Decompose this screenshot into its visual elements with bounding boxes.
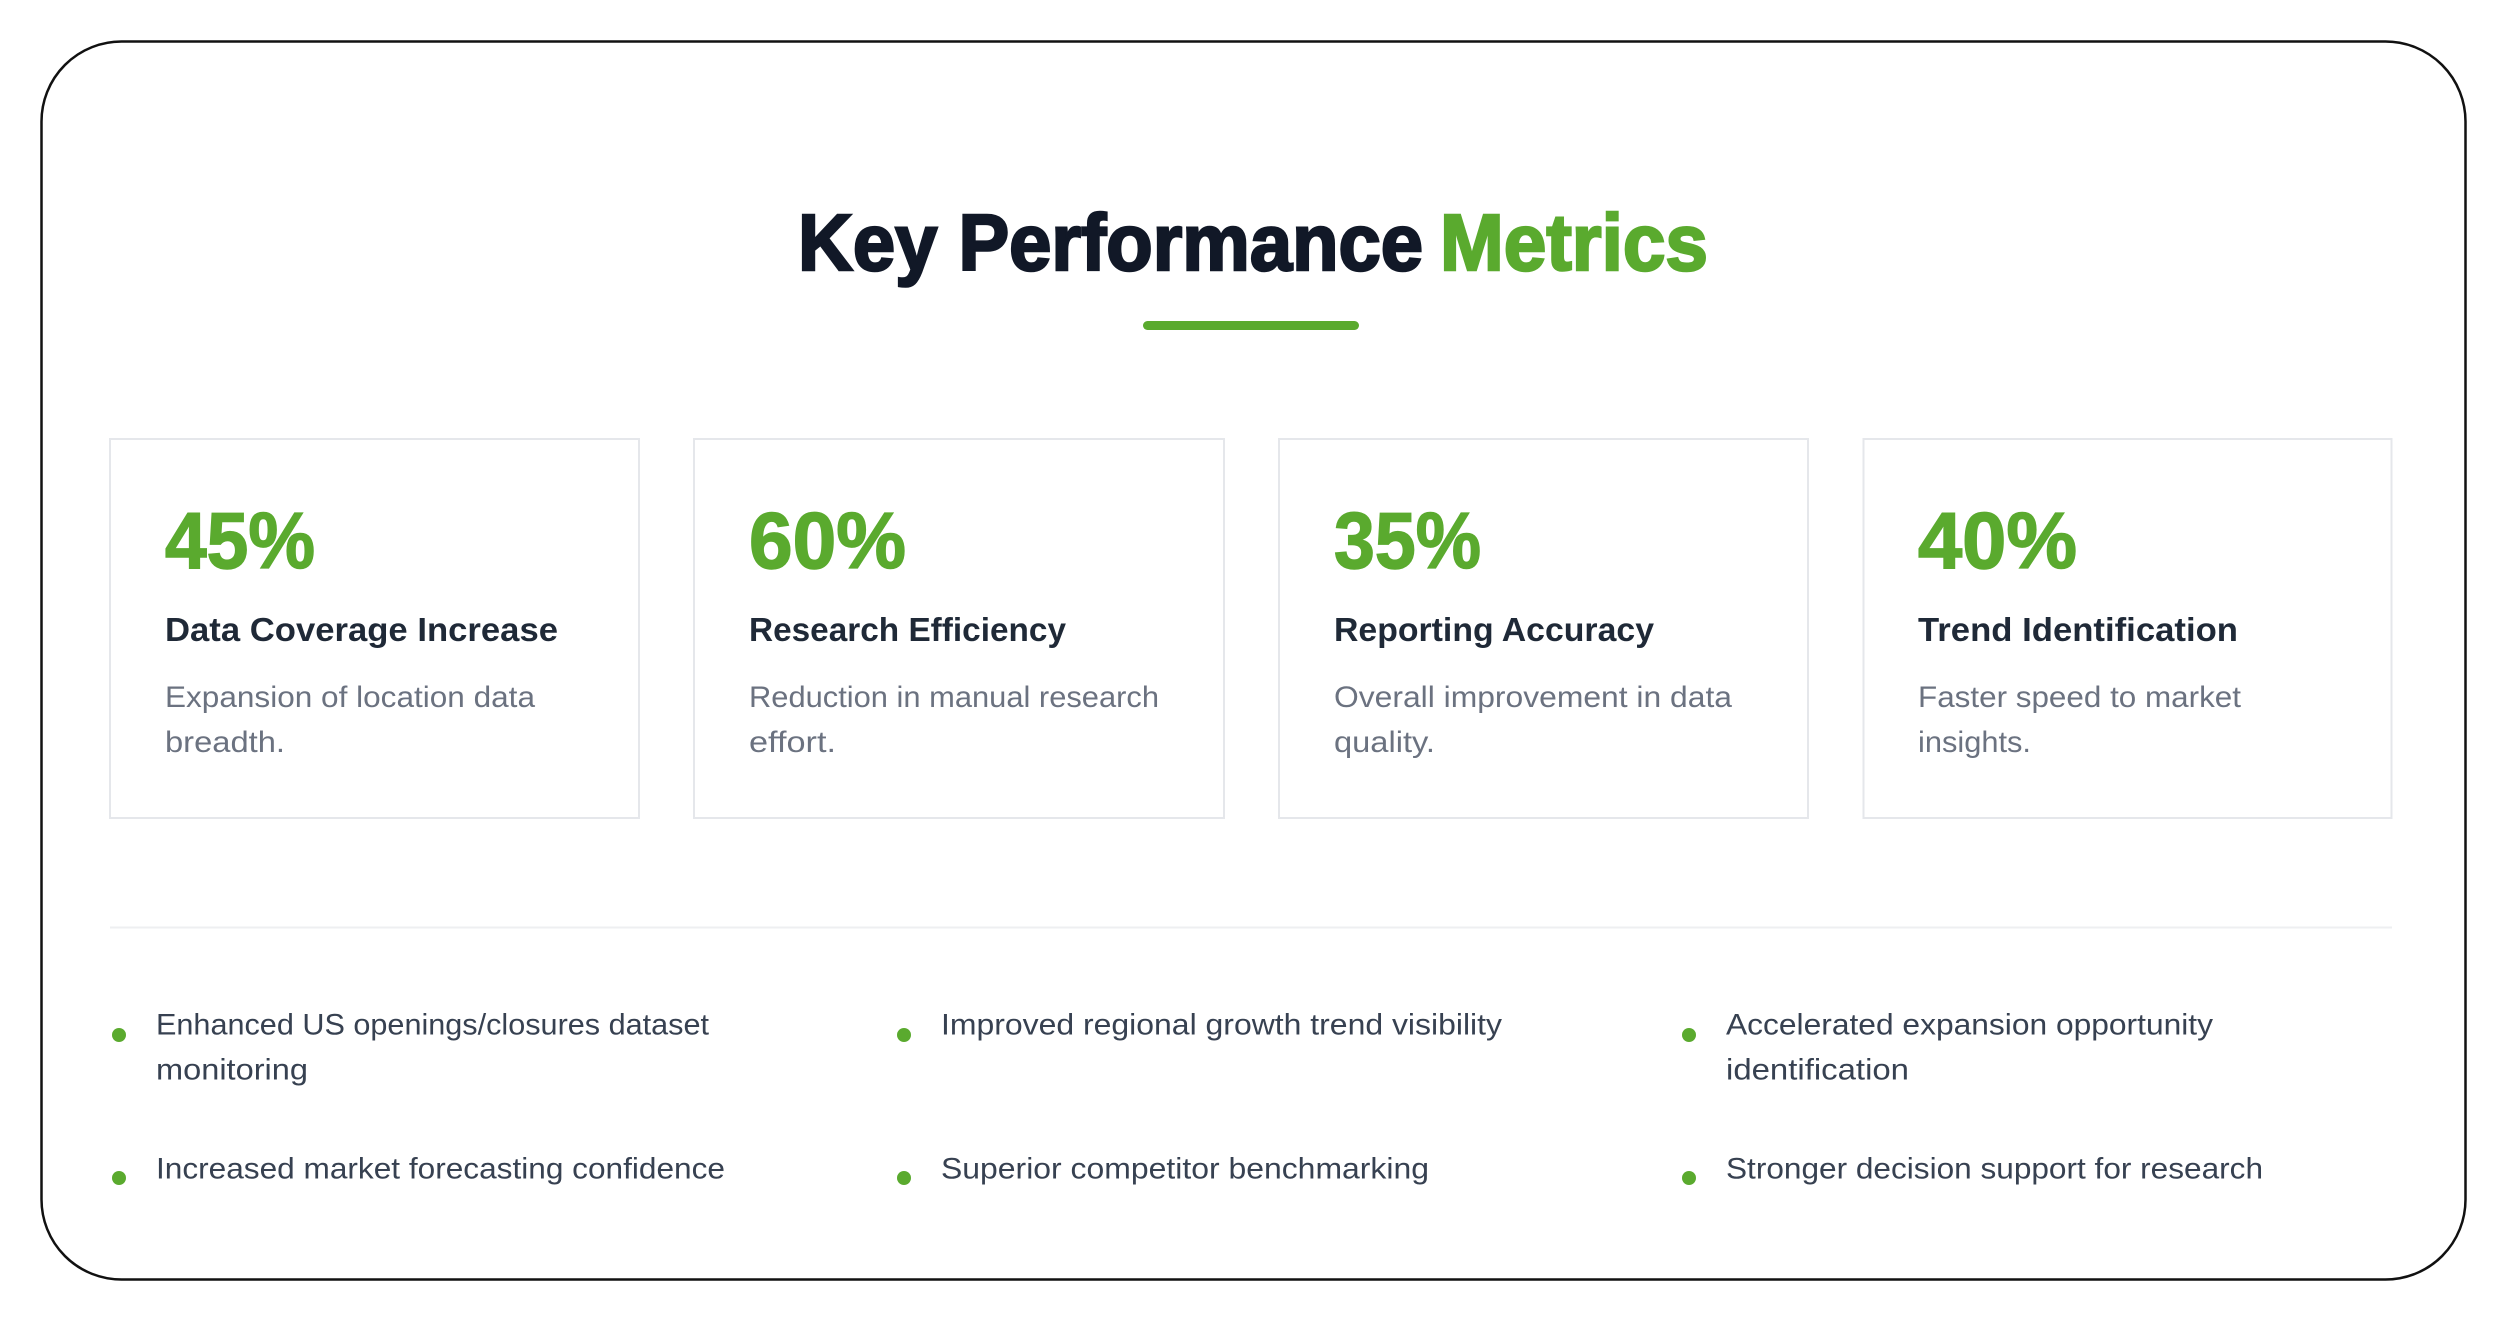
title: Metrics <box>1440 198 1708 287</box>
description: trend identification <box>1918 681 2242 759</box>
list item: openings/closures dataset: monitoring <box>156 1054 308 1086</box>
heading: trend identification: Trend Identification <box>1918 612 2238 649</box>
description: trend identification: insights. <box>1918 726 2031 759</box>
description: data coverage: breadth. <box>165 726 285 759</box>
list item: expansion opportunity: Accelerated expansion opportunity <box>1726 1008 2213 1042</box>
description: research efficiency: effort. <box>749 726 836 759</box>
list item: openings/closures dataset <box>112 1008 710 1086</box>
list item: expansion opportunity: identification <box>1726 1054 1909 1086</box>
stat: 60%: 60% <box>749 496 906 585</box>
description: research efficiency: Reduction in manual research <box>749 681 1159 714</box>
panel: research efficiency card <box>694 439 1224 818</box>
description: reporting accuracy: Overall improvement in data <box>1334 681 1732 714</box>
list item: openings/closures dataset: Enhanced US openings/closures dataset <box>156 1008 710 1042</box>
panel: reporting accuracy card <box>1279 439 1808 818</box>
panel: trend identification card <box>1864 439 2392 818</box>
stat: 35%: 35% <box>1334 496 1481 585</box>
list item: forecasting confidence: Increased market forecasting confidence <box>156 1152 725 1186</box>
heading: reporting accuracy: Reporting Accuracy <box>1334 612 1654 649</box>
heading: data coverage increase: Data Coverage Increase <box>165 612 558 649</box>
description: reporting accuracy: quality. <box>1334 726 1435 759</box>
list item: decision support: Stronger decision support for research <box>1726 1152 2263 1186</box>
panel: data coverage card <box>110 439 639 818</box>
heading: research efficiency: Research Efficiency <box>749 612 1066 649</box>
description: data coverage: Expansion of location data <box>165 681 535 714</box>
description: data coverage <box>165 681 535 759</box>
description: reporting accuracy <box>1334 681 1732 759</box>
list item: regional growth: Improved regional growth trend visibility <box>941 1008 1502 1042</box>
description: research efficiency <box>749 681 1159 759</box>
stat: 45%: 45% <box>165 496 315 585</box>
title underline <box>1143 321 1359 330</box>
title: Key Performance <box>798 198 1423 287</box>
description: trend identification: Faster speed to market <box>1918 681 2242 714</box>
list item: competitor benchmarking: Superior competitor benchmarking <box>941 1152 1429 1186</box>
stat: 40%: 40% <box>1918 496 2077 585</box>
list item: expansion opportunity <box>1682 1008 2213 1086</box>
